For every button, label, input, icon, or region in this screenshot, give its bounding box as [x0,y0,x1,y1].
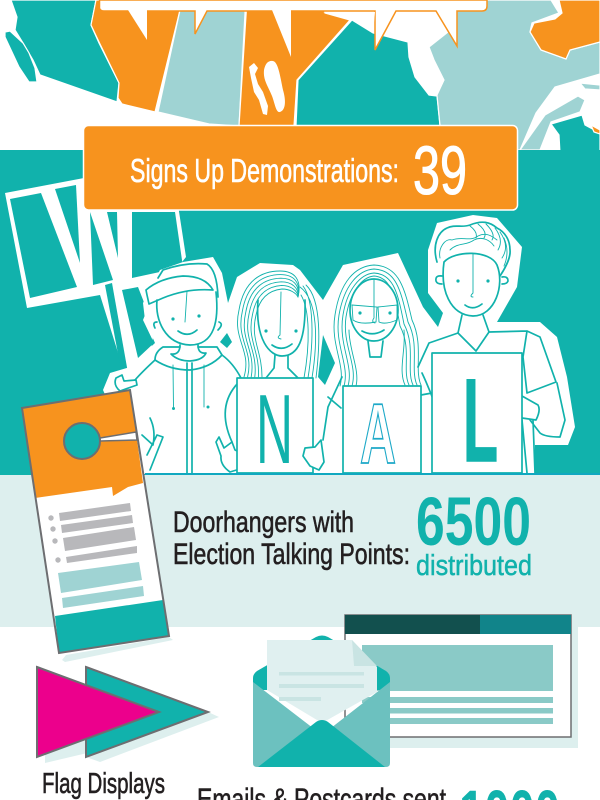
flag displays label: Flag Displays [42,768,165,800]
person 4 with short hair [418,222,565,473]
gaps between people [220,333,335,385]
doorhangers text: Doorhangers with [173,506,354,539]
doorhangers number: distributed [416,550,532,582]
Signs Up Demonstrations box [84,126,518,210]
sign letter L: L [463,355,498,487]
people silhouette [103,215,575,474]
sign letter L [432,353,522,487]
doorhangers number [416,483,532,582]
pale band [0,475,600,627]
person 3 with glasses [303,265,441,473]
person 2 with long hair [216,271,319,472]
sign letter N [237,374,313,484]
lake [249,61,285,115]
envelope [253,636,390,767]
browser window [345,615,578,748]
doorhangers number: 6500 [416,483,531,560]
top callout box [100,0,487,57]
protest signs [5,178,186,375]
doorhangers text: Election Talking Points: [173,538,410,571]
sign letter N: N [256,374,293,484]
teal band [0,150,600,475]
signs label: Signs Up Demonstrations: [130,152,399,189]
map of regions [5,0,600,172]
person 1 with cap [115,264,241,473]
ground line [145,473,600,475]
sign letter A: A [360,387,396,482]
signs number: 39 [413,132,467,209]
doorhangers text [173,506,410,571]
door hanger [22,390,173,662]
flag display icon [37,667,219,763]
